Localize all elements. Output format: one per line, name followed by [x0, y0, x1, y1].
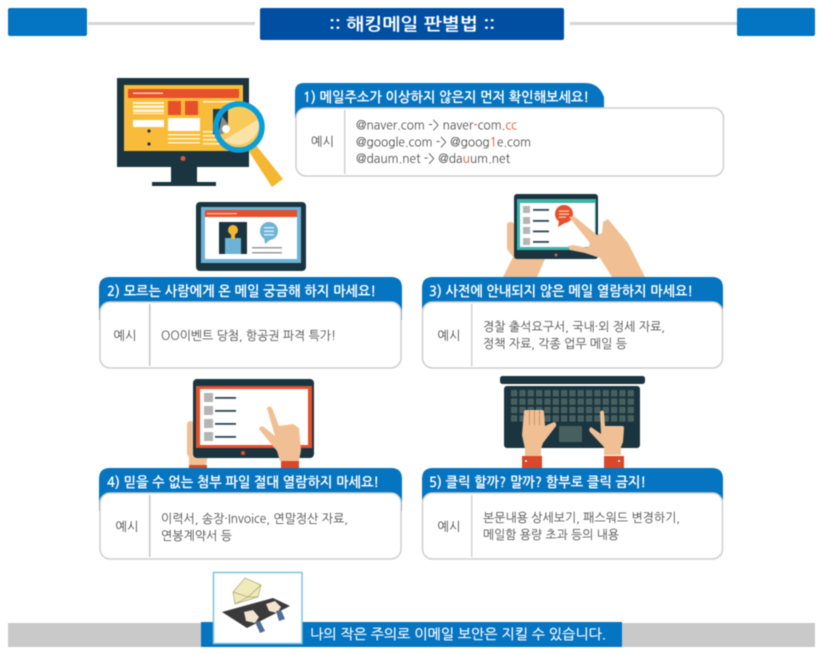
card 5 heading tab — [422, 468, 723, 511]
card 1 label: 예시 — [311, 135, 334, 148]
card 3 heading: 3) 사전에 안내되지 않은 메일 열람하지 마세요! — [429, 284, 693, 299]
icon: tablet with hands and list — [187, 379, 314, 468]
card 3 heading tab — [422, 277, 723, 320]
footer band — [8, 572, 815, 647]
card 5 — [422, 468, 723, 559]
card 1 heading: 1) 메일주소가 이상하지 않은지 먼저 확인해보세요! — [303, 90, 589, 105]
card 5 examples: 메일함 용량 초과 등의 내용 — [483, 528, 619, 541]
card 4 label: 예시 — [116, 520, 138, 533]
card 3 examples: 정책 자료, 각종 업무 메일 등 — [483, 337, 627, 350]
icon: laptop keyboard with hands — [500, 376, 645, 468]
title banner — [260, 8, 564, 40]
card 1 examples: @daum.net -> @dauum.net — [356, 152, 510, 165]
icon: tablet with hands — [503, 194, 645, 277]
card 5 examples: 본문내용 상세보기, 패스워드 변경하기, — [483, 511, 680, 524]
title: :: 해킹메일 판별법 :: — [329, 15, 495, 33]
card 1 body — [296, 108, 724, 176]
card 5 label: 예시 — [438, 520, 460, 533]
header bar — [8, 8, 815, 40]
card 2 — [99, 277, 402, 368]
card 2 example: OO이벤트 당첨, 항공권 파격 특가! — [161, 329, 336, 342]
card 2 heading tab — [99, 277, 402, 320]
icon: monitor with magnifier — [117, 78, 283, 187]
card 1 examples: @naver.com -> naver-com.cc — [356, 118, 517, 132]
card 4 examples — [161, 512, 348, 542]
card 1 examples — [356, 118, 531, 165]
footer message: 나의 작은 주의로 이메일 보안은 지킬 수 있습니다. — [310, 627, 606, 642]
card 5 heading: 5) 클릭 할까? 말까? 함부로 클릭 금지! — [429, 475, 646, 490]
card 4 examples: 연봉계약서 등 — [161, 529, 232, 542]
card 4 body — [100, 493, 401, 559]
card 1 heading tab — [295, 83, 604, 118]
card 3 examples: 경찰 출석요구서, 국내·외 정세 자료, — [483, 320, 665, 333]
icon: tablet with profile — [196, 202, 306, 271]
card 3 label: 예시 — [438, 329, 460, 342]
header left block — [8, 8, 87, 36]
card 1 examples: @google.com -> @goog1e.com — [356, 136, 531, 148]
header right block — [737, 8, 815, 36]
card 2 body — [100, 302, 401, 368]
card 3 body — [422, 302, 722, 368]
card 4 heading: 4) 믿을 수 없는 첨부 파일 절대 열람하지 마세요! — [107, 474, 379, 490]
card 5 examples — [483, 511, 680, 541]
card 5 body — [422, 493, 722, 559]
card 3 examples — [483, 320, 665, 350]
card 3 — [422, 277, 723, 368]
footer message bar — [201, 622, 622, 647]
card 4 examples: 이력서, 송장·Invoice, 연말정산 자료, — [161, 512, 348, 525]
card 4 heading tab — [99, 468, 402, 511]
card 2 label: 예시 — [114, 329, 136, 342]
icon: envelope and typing hands — [214, 572, 302, 644]
card 4 — [99, 468, 402, 559]
card 2 heading: 2) 모르는 사람에게 온 메일 궁금해 하지 마세요! — [107, 284, 376, 299]
card 1 — [295, 83, 724, 176]
